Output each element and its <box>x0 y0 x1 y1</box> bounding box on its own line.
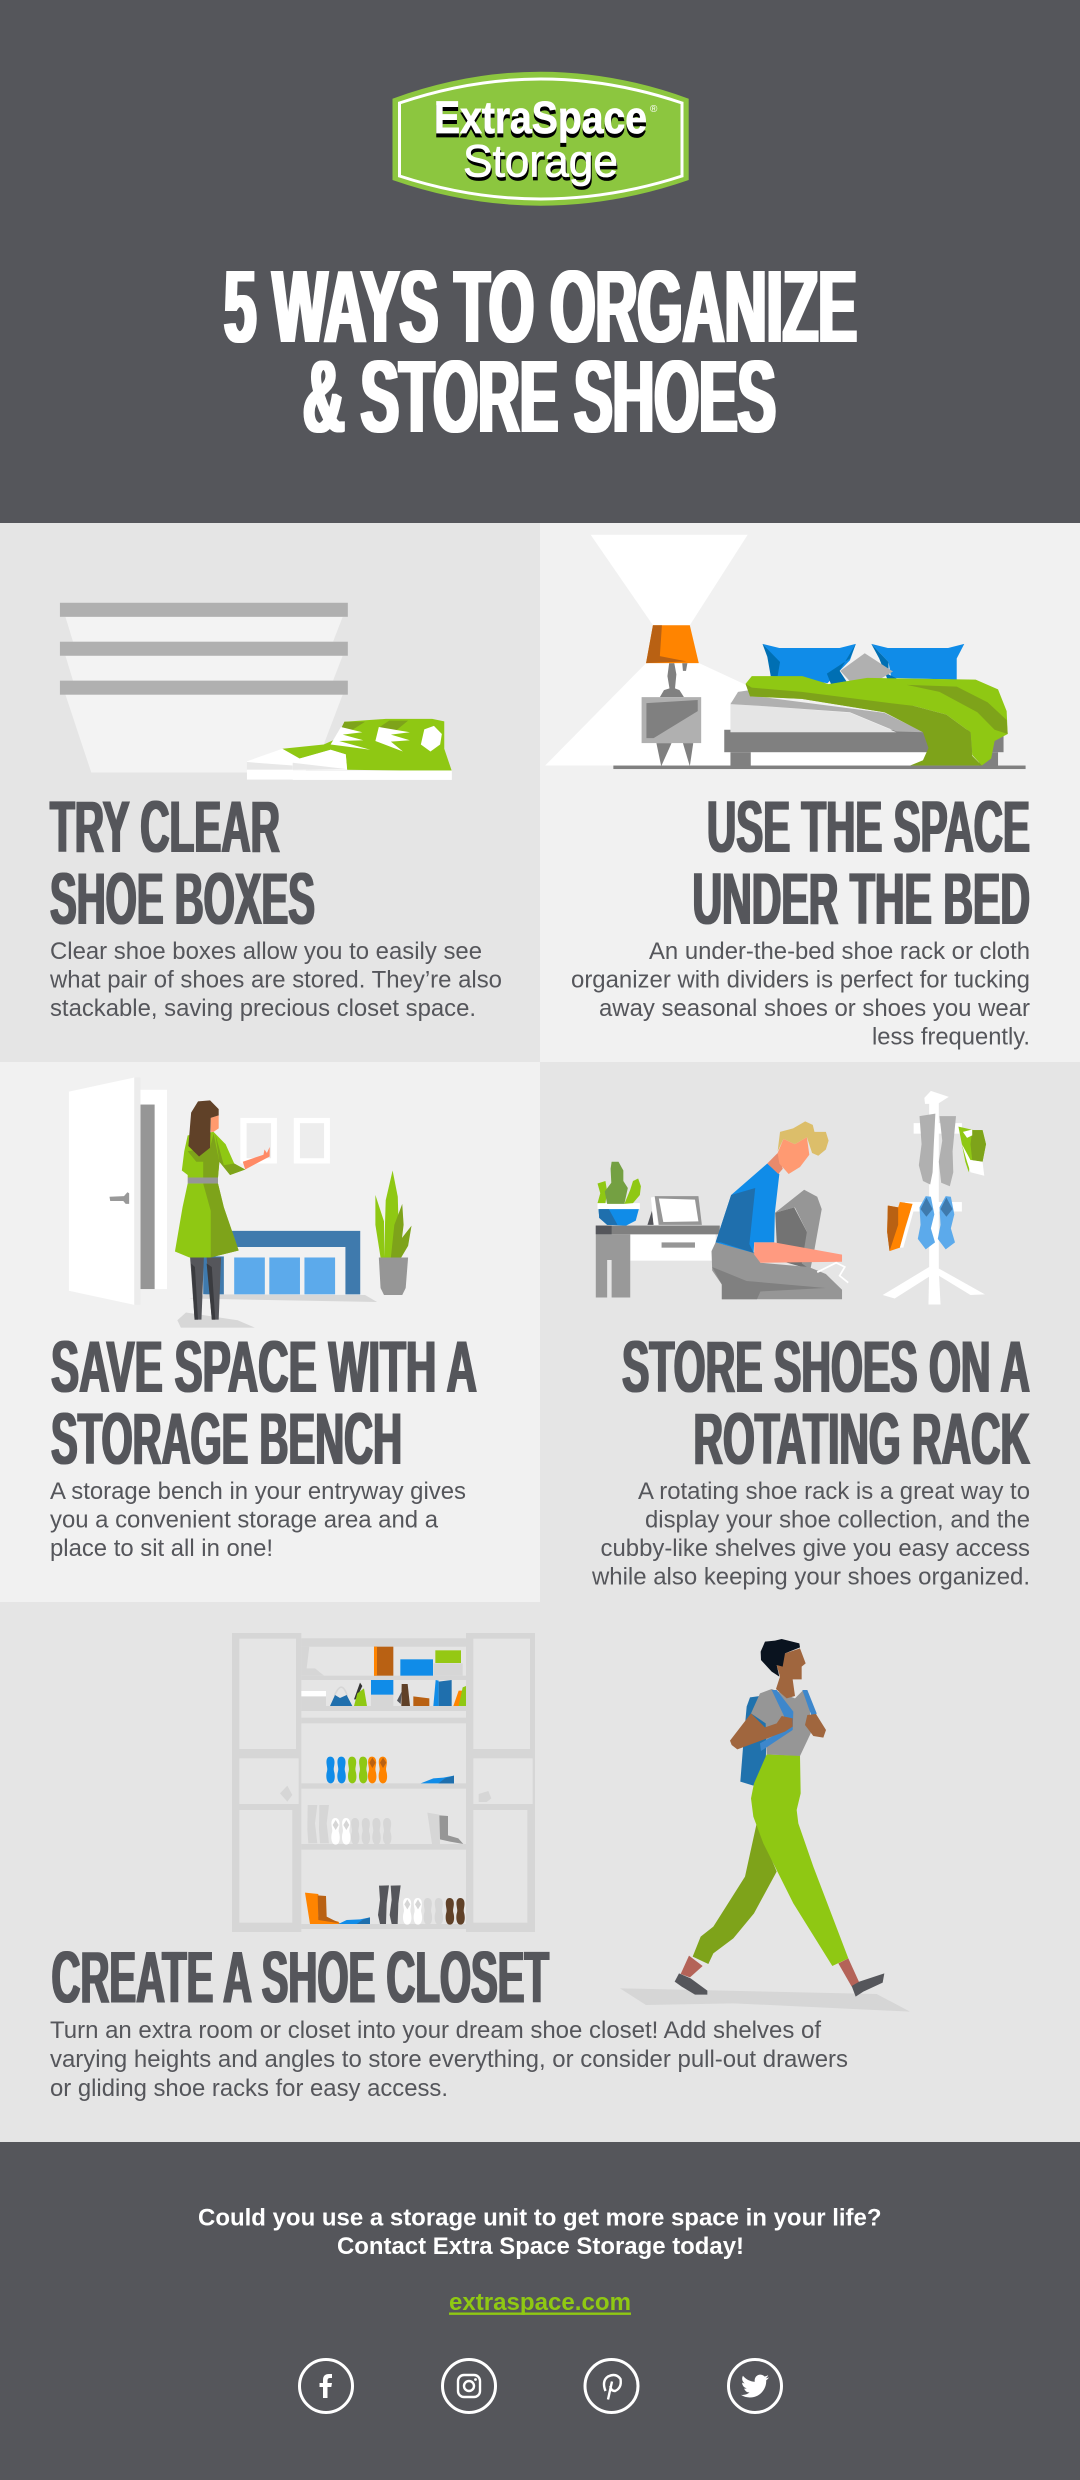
body text <box>50 1478 466 1562</box>
call to action text <box>198 2204 882 2260</box>
panel: try clear shoe boxes <box>0 523 540 1062</box>
panel: store shoes on a rotating rack <box>540 1062 1080 1602</box>
body text: Clear shoe boxes allow you to easily see <box>50 938 482 965</box>
illustration: bed and lamp <box>545 535 1026 769</box>
heading: SHOE BOXES <box>50 859 315 940</box>
body text: cubby-like shelves give you easy access <box>600 1535 1030 1562</box>
illustration: shoe closet <box>232 1633 535 1932</box>
body text: organizer with dividers is perfect for tucking <box>571 966 1030 994</box>
body text: An under-the-bed shoe rack or cloth <box>649 938 1030 965</box>
footer panel <box>0 2142 1080 2480</box>
illustration: walking person with backpack <box>620 1639 910 2012</box>
body text: while also keeping your shoes organized. <box>591 1564 1030 1590</box>
heading: CREATE A SHOE CLOSET <box>52 1938 549 2018</box>
heading <box>50 787 315 940</box>
body text: A rotating shoe rack is a great way to <box>638 1478 1030 1505</box>
body text: what pair of shoes are stored. They’re also <box>49 966 502 994</box>
body text: place to sit all in one! <box>50 1535 273 1562</box>
body text <box>49 938 502 1022</box>
icon: pinterest <box>585 2360 638 2412</box>
icon: twitter <box>728 2360 782 2412</box>
call to action text: Could you use a storage unit to get more space in your life? <box>198 2204 882 2232</box>
panel: create a shoe closet <box>0 1602 1080 2142</box>
heading: SAVE SPACE WITH A <box>51 1327 477 1408</box>
logo: ® <box>650 104 658 115</box>
title <box>224 249 857 454</box>
heading <box>692 787 1030 940</box>
illustration: stacked clear shoe boxes and sneakers <box>60 603 452 780</box>
body text <box>571 938 1030 1050</box>
call to action text: Contact Extra Space Storage today! <box>337 2233 744 2260</box>
body text <box>50 2017 848 2102</box>
logo: Storage <box>464 139 619 190</box>
body text: Turn an extra room or closet into your dream shoe closet! Add shelves of <box>50 2017 821 2044</box>
body text: away seasonal shoes or shoes you wear <box>599 995 1030 1022</box>
heading <box>51 1327 477 1480</box>
body text: you a convenient storage area and a <box>50 1506 439 1534</box>
body text: or gliding shoe racks for easy access. <box>50 2075 448 2102</box>
logo <box>392 72 689 206</box>
body text: varying heights and angles to store everything, or consider pull-out drawers <box>50 2046 848 2073</box>
heading: TRY CLEAR <box>50 787 280 868</box>
heading <box>622 1327 1030 1480</box>
panel: use the space under the bed <box>540 523 1080 1062</box>
header panel <box>0 0 1080 523</box>
body text: stackable, saving precious closet space. <box>50 995 476 1022</box>
panel: save space with a storage bench <box>0 1062 540 1602</box>
body text: less frequently. <box>872 1024 1030 1050</box>
logo: ExtraSpace <box>434 92 647 143</box>
body text <box>591 1478 1030 1590</box>
logo: Storage <box>463 136 618 187</box>
website link: extraspace.com <box>449 2289 631 2316</box>
logo: ExtraSpace <box>434 96 647 147</box>
icon: instagram <box>442 2360 496 2412</box>
body text: display your shoe collection, and the <box>645 1506 1030 1534</box>
illustration: woman, door and storage bench <box>69 1078 412 1328</box>
heading: STORAGE BENCH <box>51 1399 402 1480</box>
body text: A storage bench in your entryway gives <box>50 1478 466 1505</box>
illustration: man at desk and rotating rack <box>596 1091 986 1304</box>
icon: facebook <box>300 2360 352 2412</box>
